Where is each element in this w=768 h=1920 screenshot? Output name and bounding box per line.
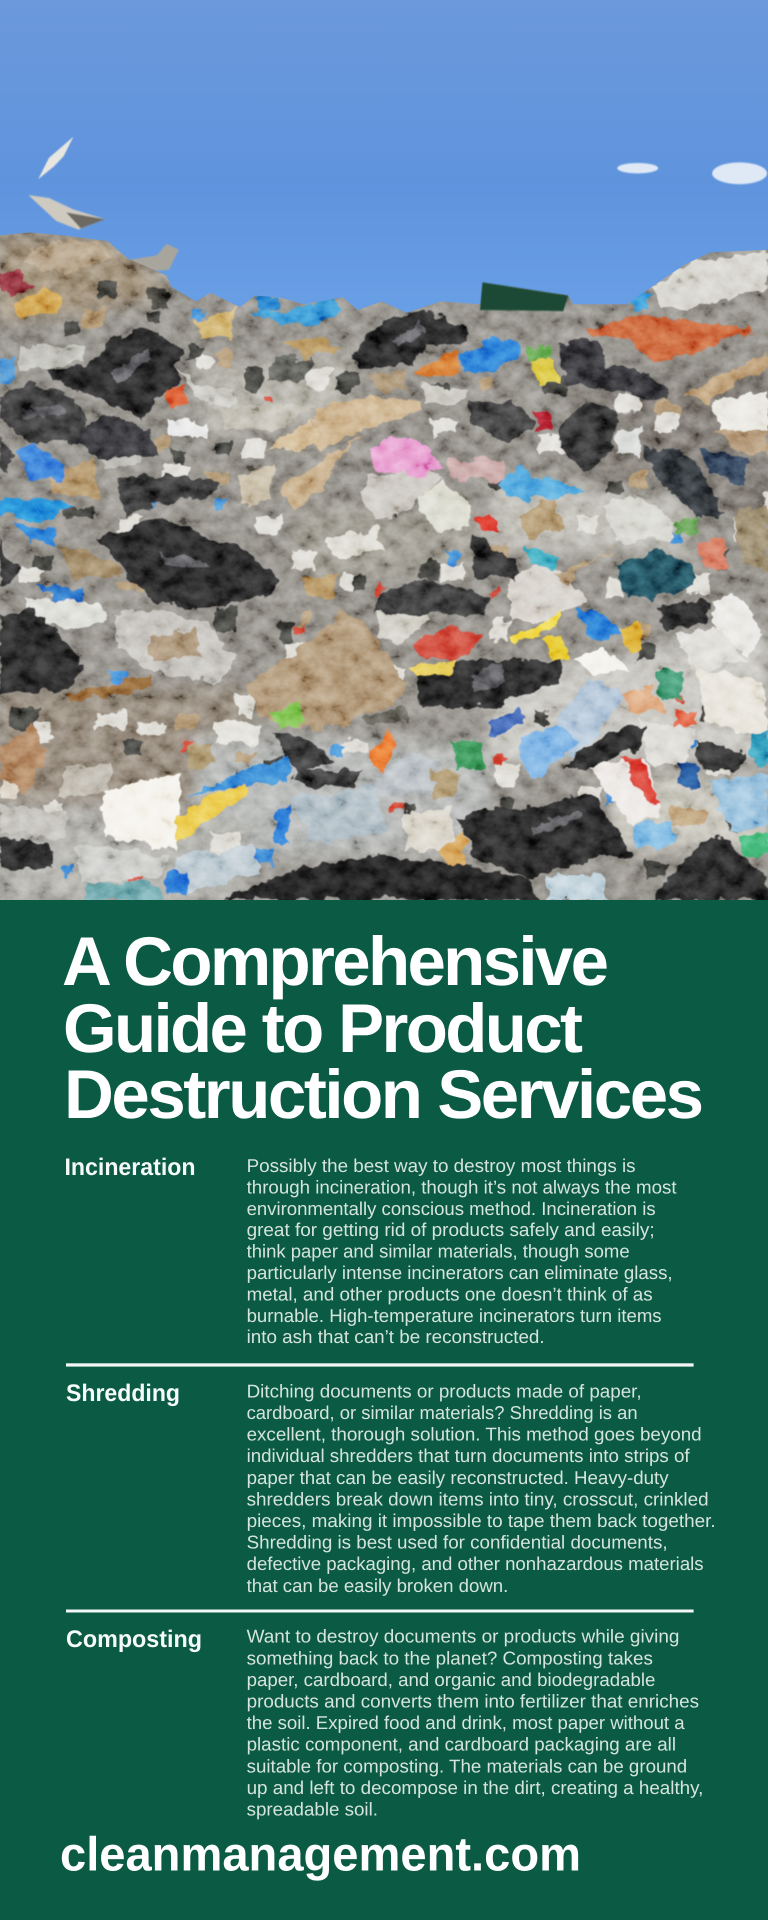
text block: Composting description: plastic component, and cardboard packaging are all xyxy=(247,1734,676,1755)
heading: Shredding: Shredding xyxy=(66,1380,180,1407)
text block: Shredding description: paper that can be easily reconstructed. Heavy-duty xyxy=(247,1467,669,1488)
text block: Composting description: spreadable soil. xyxy=(247,1798,378,1820)
text block: Shredding description: cardboard, or similar materials? Shredding is an xyxy=(247,1402,638,1423)
text block: Incineration description: great for getting rid of products safely and easily; xyxy=(247,1219,655,1240)
highlights on black bags xyxy=(20,324,583,835)
white and translucent plastic xyxy=(0,250,768,900)
text block: Incineration description: environmentally conscious method. Incineration is xyxy=(247,1198,656,1219)
blue bags and bottles xyxy=(0,293,768,900)
text block: Composting description: something back to the planet? Composting takes xyxy=(247,1647,653,1668)
panel: green content background xyxy=(60,923,716,1882)
stick xyxy=(66,676,153,703)
text block: Incineration description: into ash that can’t be reconstructed. xyxy=(247,1326,545,1347)
sky xyxy=(0,0,768,900)
text block: Composting description: paper, cardboard, and organic and biodegradable xyxy=(247,1669,655,1690)
text block: Shredding description: excellent, thorough solution. This method goes beyond xyxy=(247,1424,702,1445)
divider xyxy=(66,1363,694,1367)
text block: Shredding description: pieces, making it impossible to tape them back together. xyxy=(247,1510,716,1531)
text block: Incineration description: Possibly the best way to destroy most things is xyxy=(247,1155,636,1176)
text block: Incineration description xyxy=(247,1155,677,1347)
text block: Composting description: suitable for composting. The materials can be ground xyxy=(247,1755,687,1776)
heading: Incineration: Incineration xyxy=(64,1154,196,1181)
section: Composting xyxy=(66,1626,703,1820)
crumple shading texture xyxy=(0,232,768,900)
seagulls xyxy=(28,137,179,273)
green items xyxy=(451,740,482,769)
clouds xyxy=(617,162,767,184)
heading: Composting: Composting xyxy=(66,1626,202,1653)
text block: Composting description xyxy=(247,1626,703,1820)
text block: Shredding description: Shredding is best used for confidential documents, xyxy=(247,1532,668,1553)
website URL: cleanmanagement.com xyxy=(60,1829,581,1882)
scattered small debris xyxy=(19,321,768,849)
section: Incineration xyxy=(64,1154,677,1347)
text block: Composting description: the soil. Expired food and drink, most paper without a xyxy=(247,1712,685,1733)
text block: Incineration description: particularly intense incinerators can eliminate glass, xyxy=(247,1262,673,1283)
light and dark tonal patches xyxy=(0,235,768,900)
text block: Incineration description: metal, and other products one doesn’t think of as xyxy=(247,1283,653,1304)
text block: Shredding description: shredders break down items into tiny, crosscut, crinkled xyxy=(247,1488,709,1509)
cardboard xyxy=(0,238,768,867)
text block: Composting description: up and left to decompose in the dirt, creating a healthy, xyxy=(247,1777,703,1798)
title xyxy=(62,923,704,1133)
text block: Incineration description: think paper and similar materials, though some xyxy=(247,1241,630,1262)
title: Guide to Product xyxy=(63,990,583,1067)
title: Destruction Services xyxy=(64,1056,704,1133)
text block: Incineration description: through incineration, though it’s not always the most xyxy=(247,1176,677,1197)
text block: Shredding description: that can be easily broken down. xyxy=(247,1575,508,1596)
green plastic crate xyxy=(480,282,568,311)
text block: Incineration description: burnable. High-temperature incinerators turn items xyxy=(247,1305,662,1326)
divider xyxy=(66,1610,694,1612)
garbage heap xyxy=(0,232,768,900)
section: Shredding xyxy=(66,1380,716,1596)
text block: Composting description: Want to destroy documents or products while giving xyxy=(247,1626,679,1647)
yellow, orange, red and pink items xyxy=(176,781,250,844)
text block: Shredding description: Ditching documents or products made of paper, xyxy=(247,1380,642,1401)
black and dark bin bags xyxy=(0,287,768,900)
text block: Shredding description xyxy=(247,1380,716,1596)
text block: Shredding description: defective packaging, and other nonhazardous materials xyxy=(247,1553,704,1574)
text block: Shredding description: individual shredders that turn documents into strips of xyxy=(247,1445,690,1466)
photo: landfill garbage heap under blue sky xyxy=(0,0,768,900)
title: A Comprehensive xyxy=(62,923,609,1000)
text block: Composting description: products and converts them into fertilizer that enriches xyxy=(247,1690,699,1712)
